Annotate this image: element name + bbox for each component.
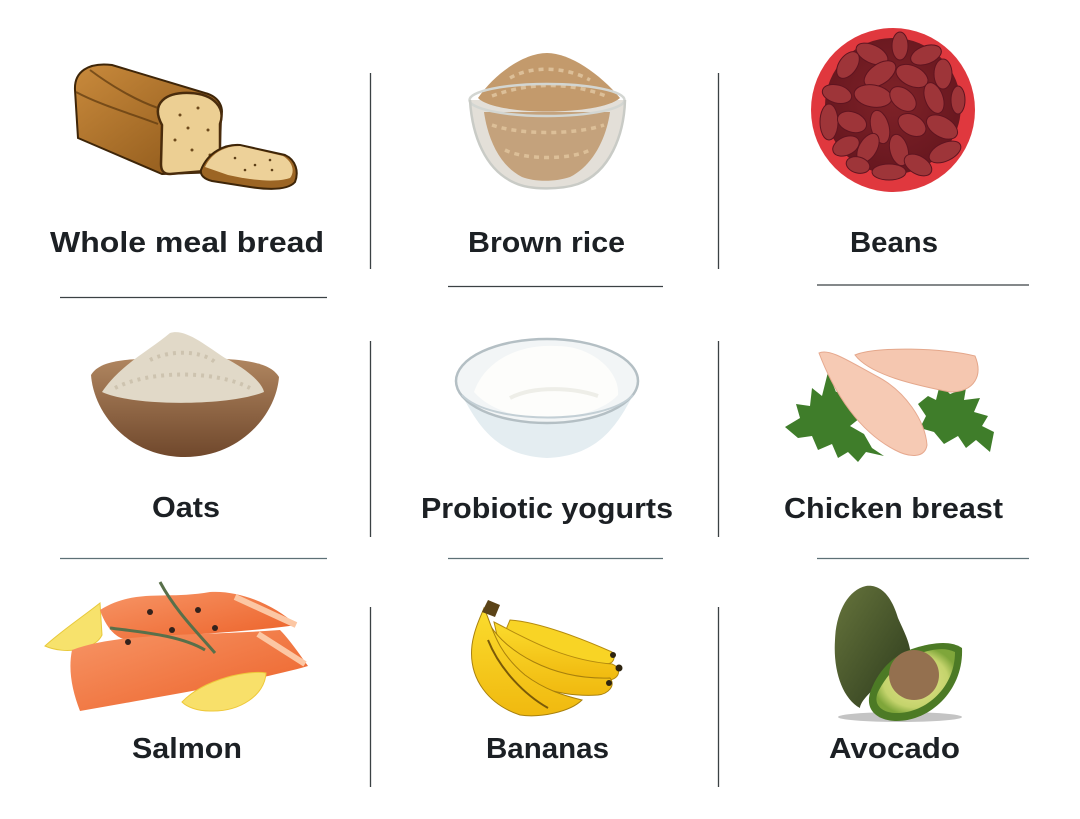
- label: salmon: Salmon: [132, 733, 242, 765]
- icon: beans: [811, 28, 975, 192]
- label: avocado: Avocado: [829, 733, 960, 765]
- icon: whole meal bread: [75, 64, 297, 189]
- label: bananas: Bananas: [486, 733, 609, 765]
- icon: salmon: [45, 582, 308, 711]
- icon: oats: [91, 332, 279, 457]
- icon: probiotic yogurts: [456, 339, 638, 458]
- label: chicken breast: Chicken breast: [784, 493, 1003, 525]
- label: brown rice: Brown rice: [468, 227, 625, 259]
- label: probiotic yogurts: Probiotic yogurts: [421, 493, 673, 525]
- label: whole meal bread: Whole meal bread: [50, 227, 324, 259]
- icon: brown rice: [470, 53, 625, 188]
- icon: chicken breast: [785, 349, 994, 462]
- dividers: [60, 73, 1029, 787]
- label: beans: Beans: [850, 227, 938, 259]
- icon: bananas: [472, 600, 622, 716]
- icon: avocado: [835, 586, 962, 722]
- label: oats: Oats: [152, 492, 220, 524]
